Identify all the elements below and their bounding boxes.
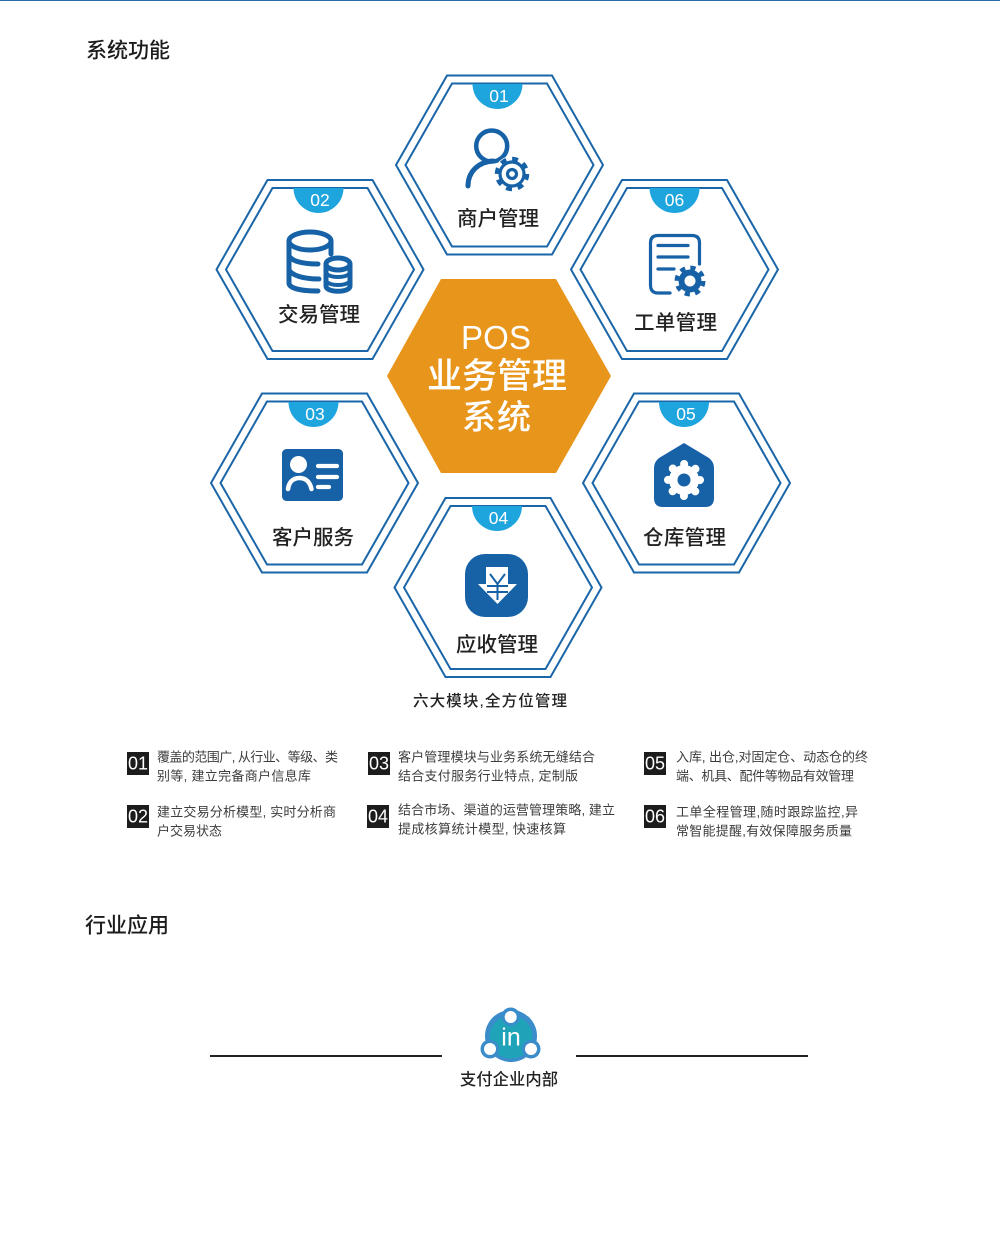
list item 01: 别等, 建立完备商户信息库 [157, 769, 311, 784]
heading: 行业应用: 行业应用 [85, 914, 169, 938]
list item 01: 01 [128, 754, 148, 774]
panel: 05 仓库管理 [583, 394, 790, 572]
list item 02 [127, 805, 336, 839]
list item 03: 客户管理模块与业务系统无缝结合 [398, 750, 595, 765]
list item 06 [644, 805, 858, 839]
list item 02: 户交易状态 [157, 824, 222, 839]
icon: house with gear [654, 443, 714, 507]
list item 04: 04 [368, 806, 388, 826]
divider line left [210, 1055, 442, 1057]
list item 05 [644, 750, 868, 784]
list item 06: 工单全程管理,随时跟踪监控,异 [676, 805, 858, 820]
panel: 04 应收管理: 应收管理 [456, 634, 538, 656]
panel: 03 客户服务: 客户服务 [272, 526, 354, 550]
icon: document with gear [650, 236, 702, 293]
icon: in network [480, 1008, 540, 1062]
list item 03 [368, 750, 595, 784]
panel: 02 交易管理 [216, 180, 424, 359]
list item 05: 05 [645, 754, 665, 774]
panel: 01 商户管理: 商户管理 [457, 208, 539, 230]
list item 03: 03 [369, 754, 389, 774]
panel: 04 应收管理: 04 [489, 508, 508, 528]
list item 04 [367, 803, 615, 837]
label: 支付企业内部: 支付企业内部 [460, 1070, 558, 1089]
list item 03: 结合支付服务行业特点, 定制版 [398, 769, 578, 784]
icon: database [289, 232, 350, 291]
panel: central hexagon: 业务管理 [427, 357, 567, 396]
panel: 04 应收管理 [394, 498, 602, 677]
list item 01 [127, 750, 338, 784]
panel: central hexagon [387, 279, 611, 473]
list item 05: 入库, 出仓,对固定仓、动态仓的终 [676, 750, 868, 765]
list item 06: 06 [645, 806, 665, 826]
panel: 06 工单管理: 工单管理 [634, 312, 717, 334]
heading: 系统功能: 系统功能 [86, 40, 170, 62]
list item 04: 结合市场、渠道的运营管理策略, 建立 [398, 803, 615, 818]
list item 02: 建立交易分析模型, 实时分析商 [157, 805, 336, 820]
panel: central hexagon: POS [461, 319, 531, 356]
panel: 05 仓库管理: 05 [676, 404, 696, 424]
panel: 01 商户管理 [396, 76, 603, 254]
panel: 03 客户服务: 03 [305, 404, 325, 424]
list item 04: 提成核算统计模型, 快速核算 [398, 822, 566, 837]
panel: 02 交易管理: 交易管理 [278, 304, 360, 326]
icon: id card [282, 449, 343, 501]
list item 02: 02 [128, 806, 148, 826]
list item 06: 常智能提醒,有效保障服务质量 [676, 824, 852, 839]
icon: in network: in [501, 1024, 521, 1052]
caption: 六大模块: 六大模块,全方位管理 [413, 691, 567, 710]
panel: 03 客户服务 [211, 394, 418, 572]
panel: central hexagon: 系统 [462, 399, 531, 437]
list item 01: 覆盖的范围广, 从行业、等级、类 [157, 750, 338, 765]
icon: user with gear [468, 130, 530, 192]
panel: 06 工单管理 [571, 180, 778, 359]
panel: 05 仓库管理: 仓库管理 [643, 526, 726, 550]
panel: 02 交易管理: 02 [310, 190, 330, 210]
panel: 01 商户管理: 01 [489, 86, 509, 106]
panel: 06 工单管理: 06 [665, 190, 684, 210]
icon: yen arrow [465, 554, 528, 617]
list item 05: 端、机具、配件等物品有效管理 [676, 769, 854, 784]
divider line right [576, 1055, 808, 1057]
